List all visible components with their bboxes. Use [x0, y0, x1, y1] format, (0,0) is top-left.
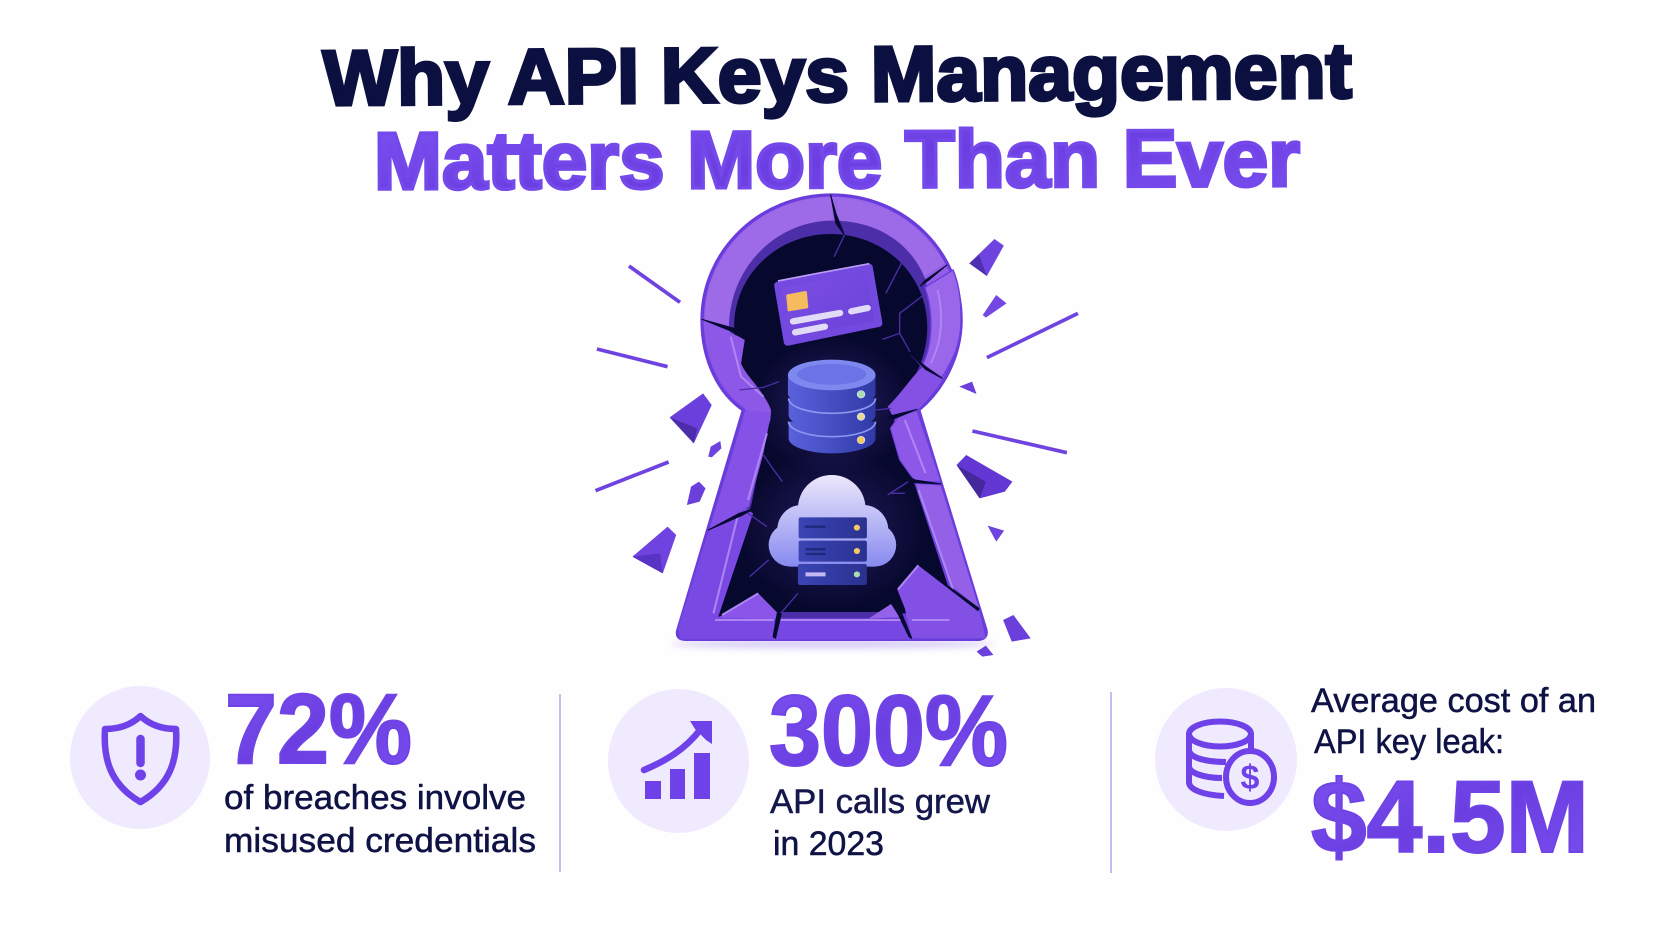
server lights — [854, 525, 860, 577]
left leg — [709, 410, 771, 530]
right rim segment — [922, 270, 961, 377]
server unit top — [799, 517, 867, 538]
frame outer facets — [705, 197, 944, 327]
card body — [778, 267, 879, 342]
server unit bottom — [798, 564, 867, 585]
icon: database and dollar coin — [1189, 722, 1274, 803]
card stripes — [793, 308, 868, 332]
description line 2: API key leak: — [1314, 723, 1504, 761]
database status lights — [857, 391, 865, 444]
title — [322, 26, 1352, 207]
right lower arc segment — [888, 353, 942, 416]
flying shards — [632, 239, 1031, 657]
icon circle: growth chart — [608, 689, 749, 833]
icon: credit card — [778, 264, 879, 342]
description line 1: of breaches involve — [224, 779, 526, 817]
value 300%: 300% — [769, 675, 1008, 787]
title line 2: Matters More Than Ever — [374, 114, 1300, 207]
bottom strip — [776, 618, 910, 639]
icon: database — [788, 360, 876, 453]
database lower disk top edge — [789, 422, 876, 437]
description line 1: Average cost of an — [1311, 682, 1596, 720]
interior glow — [753, 337, 912, 477]
description line 1: API calls grew — [770, 783, 990, 821]
frame inner bevel — [719, 221, 953, 617]
bottom right chunk — [897, 565, 986, 638]
database middle disk top edge — [789, 398, 876, 413]
database lower disk — [789, 422, 876, 453]
right leg lower — [915, 483, 980, 610]
title line 1: Why API Keys Management — [322, 26, 1352, 122]
keyhole dark interior — [718, 234, 957, 617]
burst rays — [596, 266, 1078, 491]
database lid — [788, 360, 876, 390]
illustration: broken keyhole — [596, 195, 1078, 657]
icon: growth chart with arrow — [644, 721, 712, 799]
keyhole frame — [677, 195, 986, 639]
cracks — [702, 195, 979, 638]
database top disk — [788, 375, 876, 408]
cloud shape — [769, 475, 896, 567]
description line 2: misused credentials — [224, 822, 536, 860]
database lid recess — [797, 364, 866, 385]
bottom left chunk — [719, 593, 778, 619]
description line 2: in 2023 — [773, 825, 884, 863]
icon: database and dollar coin: $ — [1241, 759, 1260, 797]
stat: 72% of breaches — [70, 673, 536, 860]
value $4.5M: $4.5M — [1311, 760, 1589, 874]
interior glow lower — [739, 450, 926, 610]
server slots — [805, 527, 826, 554]
card top highlight — [778, 264, 869, 281]
database middle disk — [789, 398, 876, 430]
icon circle: shield — [70, 686, 210, 829]
left rim segment — [703, 320, 771, 440]
card chip — [788, 292, 807, 310]
stat: 300% API calls — [608, 675, 1008, 863]
right leg upper — [890, 411, 941, 482]
icon circle: coins — [1155, 688, 1297, 831]
stat: $4.5M average cost — [1155, 682, 1596, 874]
hairline cracks — [739, 235, 924, 613]
icon: cloud with servers — [769, 475, 896, 585]
value 72%: 72% — [225, 673, 412, 784]
server unit middle — [799, 541, 867, 562]
icon: shield with exclamation — [105, 716, 176, 802]
bottom middle chunk — [869, 604, 900, 619]
server slot light — [806, 568, 826, 580]
bottom inner band — [781, 612, 891, 619]
bottom left corner piece — [678, 508, 776, 639]
keyhole ground shadow — [670, 639, 994, 649]
divider — [1110, 692, 1112, 873]
divider — [559, 694, 561, 872]
frame highlights — [713, 290, 953, 620]
